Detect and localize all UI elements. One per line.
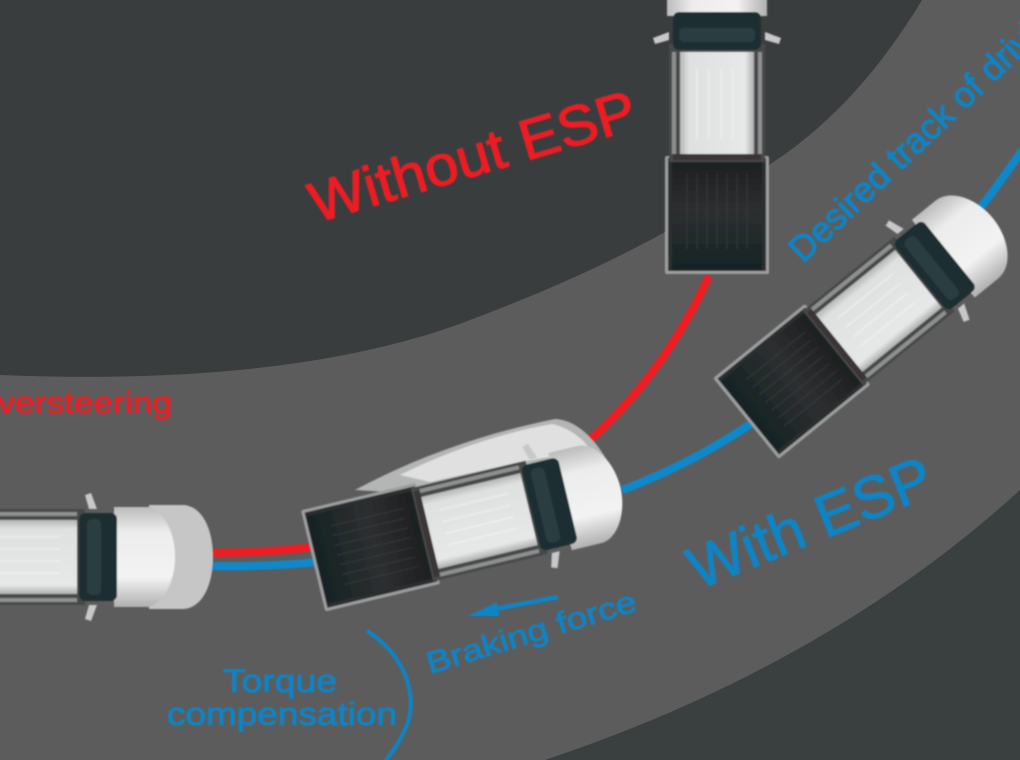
arc: torque arrow: [367, 631, 411, 760]
blue track: with ESP: [212, 148, 1020, 566]
truck: with ESP, right: [706, 169, 1020, 468]
label: braking force: Braking force: [422, 583, 641, 681]
heading: With ESP: With ESP: [678, 444, 942, 602]
label: torque compensation: [167, 663, 397, 732]
truck: centre with ghost outline: [298, 419, 635, 623]
label: torque compensation: compensation: [167, 696, 397, 732]
truck: spinning out, top: [653, 0, 781, 274]
red track: without ESP: [212, 276, 709, 553]
label: torque compensation: Torque: [223, 663, 337, 699]
truck: entering curve, left: [0, 493, 213, 621]
heading: Without ESP: Without ESP: [302, 78, 644, 235]
dark outer area: top left: [0, 0, 922, 377]
dark outer area: bottom right: [545, 490, 1020, 760]
arrow: braking force: [468, 597, 558, 616]
